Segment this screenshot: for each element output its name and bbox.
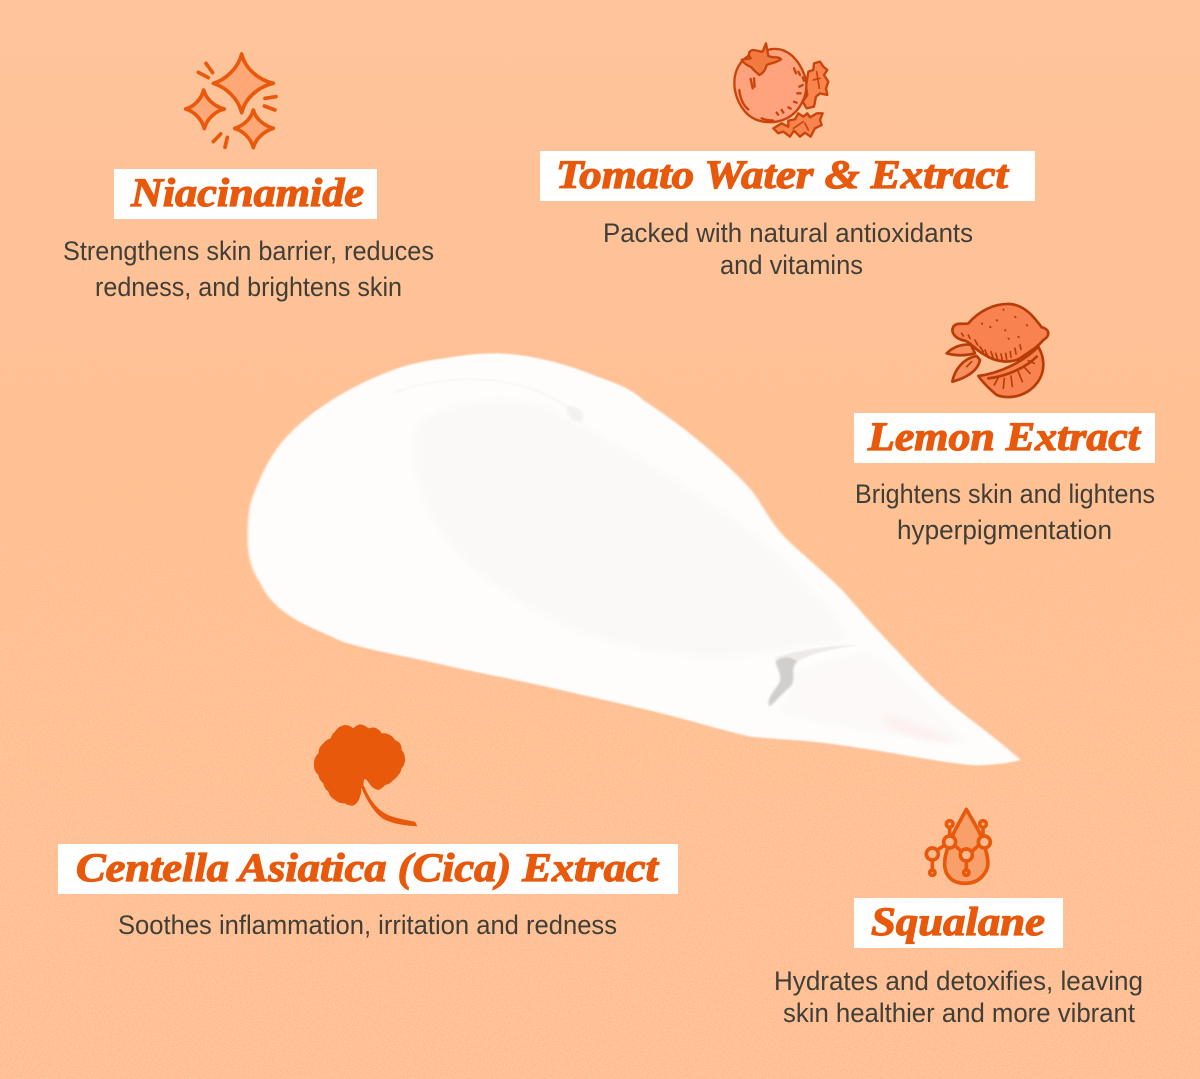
description: Niacinamide: Strengthens skin barrier, reduces (63, 236, 434, 266)
heading: Centella Asiatica (Cica) Extract: Centella Asiatica (Cica) Extract (76, 845, 660, 890)
crease shadow line (773, 645, 860, 662)
description: Lemon: Brightens skin and lightens (855, 479, 1155, 509)
smooth inner trough of the swatch (414, 400, 847, 658)
icon: sparkles (186, 54, 276, 148)
heading: Niacinamide: Niacinamide (130, 170, 364, 215)
panel: centella (58, 724, 678, 940)
icon: lemon (947, 304, 1048, 397)
panel: niacinamide (63, 54, 434, 302)
crease fold (769, 658, 797, 707)
description: Centella: Soothes inflammation, irritation and redness (118, 910, 617, 940)
description: Niacinamide (63, 236, 434, 302)
ridge highlight (393, 379, 567, 407)
description: Squalane (774, 966, 1143, 1028)
heading: Squalane (854, 898, 1063, 948)
panel: lemon (854, 304, 1155, 545)
description: Squalane: Hydrates and detoxifies, leaving (774, 966, 1143, 996)
icon: squalane drop molecule (926, 809, 990, 883)
icon: tomato (734, 43, 828, 137)
tip shading (781, 655, 970, 743)
panel: tomato (540, 43, 1035, 280)
bottom parsley leaf (773, 113, 823, 137)
cream swatch (248, 353, 1021, 765)
heading: Lemon Extract: Lemon Extract (867, 414, 1142, 459)
heading: Tomato Water & Extract: Tomato Water & Extract (556, 152, 1010, 197)
description: Tomato: Packed with natural antioxidants (603, 218, 973, 248)
description: Niacinamide: redness, and brightens skin (95, 272, 402, 302)
heading: Squalane: Squalane (871, 899, 1045, 944)
description: Lemon: hyperpigmentation (897, 515, 1112, 545)
right parsley leaf (803, 62, 828, 108)
icon: centella leaf (314, 724, 417, 826)
description: Tomato (603, 218, 973, 280)
description: Lemon (855, 479, 1155, 545)
description: Tomato: and vitamins (720, 250, 863, 280)
description: Squalane: skin healthier and more vibrant (783, 998, 1135, 1028)
panel: squalane (774, 809, 1143, 1028)
